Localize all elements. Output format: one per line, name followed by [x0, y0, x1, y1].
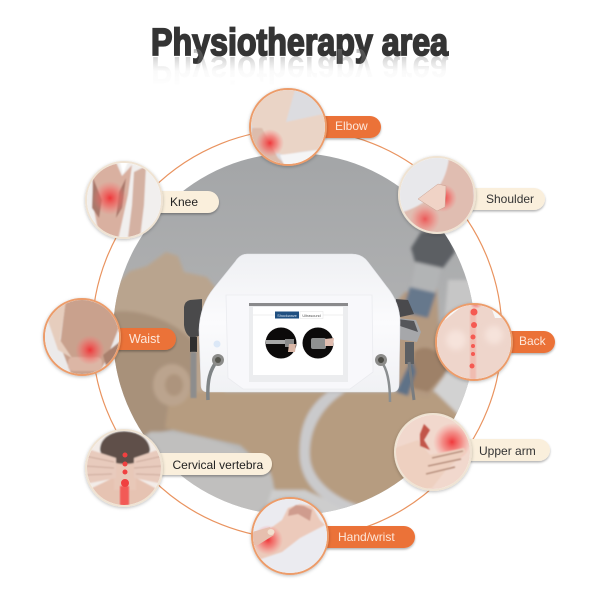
ultrasound tab: Ultrasound: [302, 314, 321, 318]
label: Cervical vertebra: Cervical vertebra: [172, 458, 264, 472]
therapist hand: [412, 348, 448, 392]
label: Back: [495, 331, 555, 353]
label: Shoulder: Shoulder: [486, 192, 534, 206]
face: [108, 252, 225, 400]
ear: [153, 364, 191, 406]
label: Upper arm: [460, 439, 550, 461]
ultrasound handpiece icon: [302, 328, 334, 358]
chest and torso: [165, 392, 480, 505]
left handle: [184, 299, 202, 398]
label: Knee: [150, 191, 219, 213]
label: Waist: [105, 328, 176, 350]
thumbnail: shoulder: [398, 157, 476, 235]
title reflection: Physiotherapy area: [151, 48, 449, 90]
shockwave handpiece icon: [266, 328, 296, 358]
thumbnail: upper arm: [394, 413, 472, 491]
label: Upper arm: Upper arm: [479, 444, 536, 458]
pillow: [146, 430, 274, 512]
label: Back: Back: [519, 334, 547, 348]
therapist background: [444, 280, 472, 370]
white sheet: [433, 372, 468, 415]
thumbnail: back: [436, 295, 512, 380]
title: Physiotherapy area: [151, 22, 449, 64]
thumbnail: hand/wrist: [250, 497, 329, 575]
thumbnail: cervical vertebra: [85, 430, 163, 508]
right handle: [396, 299, 421, 400]
sheet under torso: [268, 488, 342, 513]
title: [151, 22, 449, 90]
central circular photo: [108, 150, 480, 520]
applicator: [411, 232, 455, 268]
device: [184, 254, 421, 402]
label: Hand/wrist: Hand/wrist: [338, 530, 395, 544]
orange ring: [92, 129, 502, 539]
hair: [114, 311, 191, 436]
tank top strap: [300, 392, 358, 510]
power LED: [214, 340, 220, 348]
label: Hand/wrist: [310, 526, 415, 548]
label: Elbow: [310, 116, 381, 138]
right connector and cable: [375, 354, 390, 402]
left connector and cable: [208, 354, 224, 400]
screen: [253, 307, 343, 375]
label: Knee: Knee: [170, 195, 198, 209]
screen bezel: [249, 303, 348, 382]
therapist arm: [398, 288, 445, 398]
thumbnail: elbow: [248, 86, 328, 168]
label: Shoulder: [460, 188, 545, 210]
label: Waist: Waist: [129, 332, 160, 346]
thumbnail: knee: [85, 162, 163, 240]
device body: [199, 254, 400, 392]
front panel: [226, 295, 373, 389]
label: Cervical vertebra: [150, 453, 272, 475]
shockwave tab: Shockwave: [277, 314, 297, 318]
thumbnail: waist: [44, 298, 122, 376]
label: Elbow: Elbow: [335, 119, 368, 133]
